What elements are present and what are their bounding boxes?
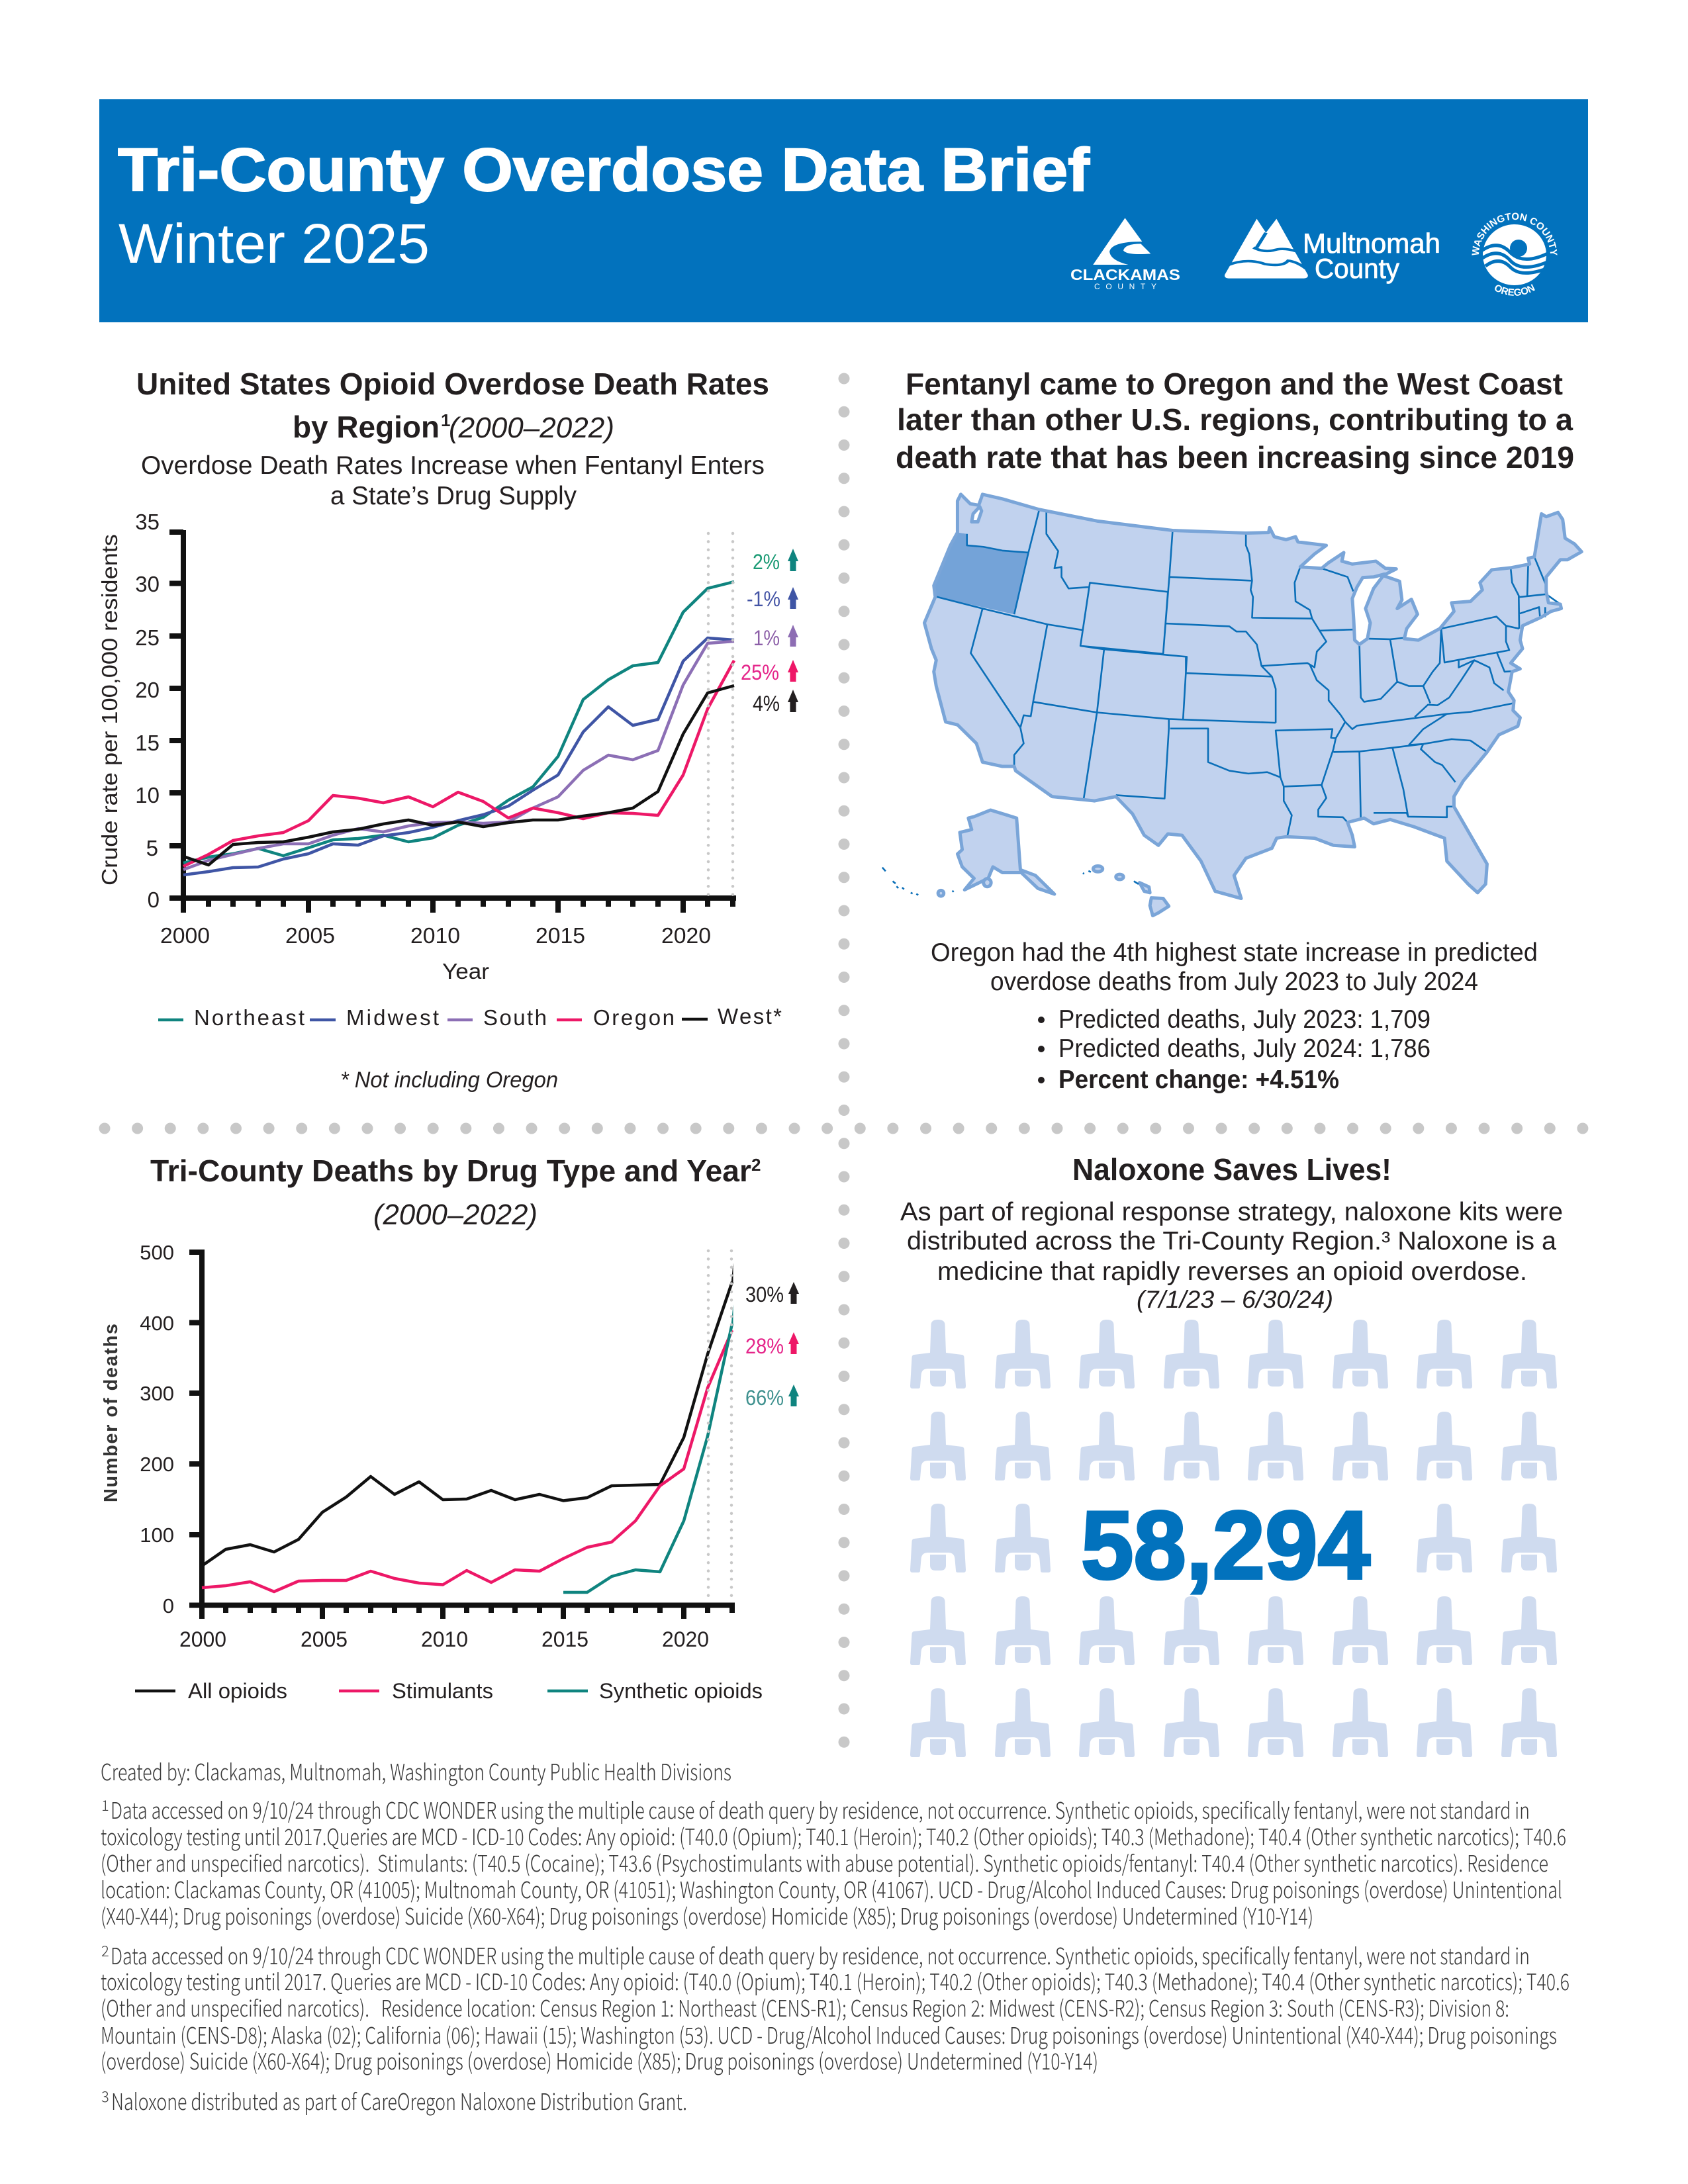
change labels: 30% — [745, 1283, 784, 1306]
change labels: 2% — [753, 550, 780, 574]
dotted dividers — [105, 379, 1585, 1747]
description: As part of regional response strategy, naloxone kits were — [900, 1198, 1563, 1226]
legend: Midwest — [346, 1005, 439, 1030]
panel: Fentanyl on the West Coast — [882, 367, 1581, 1094]
y axis labels: 0 — [163, 1594, 174, 1617]
logo: Multnomah County: County — [1315, 253, 1399, 284]
logo: Washington County — [1472, 213, 1558, 296]
heading: Tri-County Deaths by Drug Type and Year — [150, 1154, 751, 1188]
change labels: 1% — [753, 626, 780, 650]
legend: Oregon — [593, 1005, 675, 1030]
x axis labels — [160, 923, 711, 948]
heading: United States Opioid Overdose Death Rates — [136, 367, 769, 401]
series: All opioids — [202, 1263, 733, 1566]
heading: later than other U.S. regions, contributing to a — [897, 402, 1573, 437]
change arrows — [788, 1282, 799, 1406]
footnote 3: 3 — [101, 2085, 109, 2107]
logo: Washington County: WASHINGTON COUNTY — [1472, 213, 1558, 255]
panel: Naloxone saves lives — [900, 1152, 1563, 1757]
y axis labels: 5 — [146, 836, 158, 860]
header banner — [99, 99, 1588, 322]
panel: Tri-County deaths by drug type — [101, 1154, 799, 1703]
y axis labels: 30 — [135, 572, 160, 596]
logo: Clackamas County: CLACKAMAS — [1070, 266, 1180, 283]
map caption — [931, 938, 1538, 996]
footnote 3: Naloxone distributed as part of CareOregon Naloxone Distribution Grant. — [111, 2084, 687, 2116]
subheading: Overdose Death Rates Increase when Fentanyl Enters — [141, 451, 765, 480]
heading — [896, 367, 1574, 475]
axes — [169, 530, 736, 913]
series: Northeast — [183, 582, 734, 863]
y axis labels: 10 — [135, 783, 160, 807]
y axis labels: 25 — [135, 625, 160, 650]
legend: West* — [718, 1004, 782, 1028]
line chart: crude rate by region — [97, 510, 798, 983]
subtitle: Winter 2025 — [118, 212, 430, 275]
footnote 1 — [101, 1793, 1566, 1931]
series: Stimulants — [202, 1330, 732, 1592]
y axis labels: 300 — [140, 1382, 174, 1405]
x axis labels: 2010 — [421, 1627, 468, 1651]
heading: Naloxone Saves Lives! — [1072, 1152, 1391, 1187]
Hawaii and islands — [882, 866, 1169, 916]
legend: All opioids — [188, 1679, 287, 1703]
footnotes — [101, 1754, 1570, 2116]
y axis labels: 35 — [135, 510, 160, 534]
y axis labels: 100 — [140, 1524, 174, 1547]
change arrows — [788, 549, 798, 712]
x axis labels: 2015 — [541, 1627, 588, 1651]
y axis labels — [140, 1241, 174, 1617]
series: West — [183, 686, 734, 865]
x axis labels: 2020 — [662, 1627, 709, 1651]
legend: Synthetic opioids — [599, 1679, 763, 1703]
title: Tri-County Overdose Data Brief — [118, 136, 1090, 204]
description: distributed across the Tri-County Region.³ Naloxone is a — [907, 1227, 1556, 1255]
change labels — [741, 550, 780, 715]
x axis labels — [179, 1627, 709, 1651]
logo: Clackamas County: COUNTY — [1094, 282, 1156, 291]
change labels: 28% — [745, 1334, 784, 1358]
footnote 1: 1 — [101, 1794, 109, 1815]
x axis labels: 2005 — [285, 923, 335, 948]
panel: US opioid death rates — [97, 367, 798, 1093]
predicted deaths list: Predicted deaths, July 2023: 1,709 — [1058, 1005, 1430, 1034]
heading — [136, 367, 769, 444]
y axis title: Number of deaths — [101, 1324, 122, 1502]
x axis labels: 2015 — [536, 923, 585, 948]
description — [900, 1198, 1563, 1313]
heading — [150, 1154, 761, 1231]
state borders — [935, 510, 1560, 835]
predicted deaths list: Percent change: +4.51% — [1058, 1066, 1339, 1094]
subheading: a State’s Drug Supply — [330, 482, 577, 510]
x axis title: Year — [442, 959, 489, 983]
map caption: Oregon had the 4th highest state increase in predicted — [931, 938, 1538, 967]
subheading — [141, 451, 765, 510]
change labels — [745, 1283, 784, 1410]
logo: Washington County: OREGON — [1495, 284, 1535, 296]
logo: Multnomah County: Multnomah — [1303, 228, 1440, 259]
x axis labels: 2010 — [410, 923, 460, 948]
x axis labels: 2000 — [160, 923, 210, 948]
legend: Stimulants — [392, 1679, 493, 1703]
y axis labels: 200 — [140, 1453, 174, 1476]
change labels: -1% — [747, 587, 780, 611]
credit: Created by: Clackamas, Multnomah, Washington County Public Health Divisions — [101, 1754, 731, 1787]
x axis labels: 2000 — [179, 1627, 226, 1651]
description: (7/1/23 – 6/30/24) — [1137, 1286, 1333, 1313]
line chart: deaths by drug type — [101, 1241, 799, 1651]
y axis labels — [135, 510, 160, 912]
predicted deaths list: Predicted deaths, July 2024: 1,786 — [1058, 1034, 1430, 1063]
heading: Fentanyl came to Oregon and the West Coast — [906, 367, 1563, 401]
legend — [135, 1679, 763, 1703]
y axis labels: 400 — [140, 1312, 174, 1335]
y axis title: Crude rate per 100,000 residents — [97, 534, 122, 886]
y axis labels: 0 — [148, 887, 160, 912]
x axis labels: 2020 — [661, 923, 711, 948]
series: South — [183, 641, 734, 870]
x axis labels: 2005 — [301, 1627, 348, 1651]
axes — [189, 1250, 735, 1619]
legend: South — [483, 1005, 547, 1030]
footnote 2: 2 — [101, 1940, 109, 1961]
heading: 1 — [441, 410, 450, 430]
outer coastline — [924, 494, 1581, 899]
logo: Clackamas County — [1070, 218, 1180, 291]
y axis labels: 20 — [135, 678, 160, 702]
Alaska — [957, 810, 1055, 894]
US map — [882, 494, 1581, 916]
footnote 2 — [101, 1938, 1570, 2076]
description: medicine that rapidly reverses an opioid overdose. — [937, 1257, 1527, 1286]
series: Synthetic opioids — [563, 1304, 733, 1592]
footnote 2: (overdose) Suicide (X60-X64); Drug poisonings (overdose) Homicide (X85); Drug poisonings (overdose) Undetermined (Y10-Y14) — [101, 2044, 1098, 2076]
heading: death rate that has been increasing since 2019 — [896, 440, 1574, 475]
series: Oregon — [183, 660, 734, 866]
heading: 2 — [751, 1155, 761, 1175]
Oregon highlight — [934, 533, 1029, 614]
Great Lakes and Puget Sound — [972, 507, 1384, 645]
big number: 58,294 — [1081, 1491, 1370, 1599]
heading: by Region — [293, 410, 440, 444]
y axis labels: 500 — [140, 1241, 174, 1264]
legend — [158, 1004, 782, 1030]
icon grid: naloxone kits — [910, 1320, 1557, 1757]
change labels: 25% — [741, 660, 779, 684]
series: Midwest — [183, 638, 734, 875]
note: * Not including Oregon — [340, 1068, 558, 1093]
logo: Multnomah County — [1225, 219, 1440, 284]
contiguous states fill — [924, 494, 1581, 899]
heading: (2000–2022) — [449, 412, 614, 444]
change labels: 4% — [753, 692, 780, 715]
predicted deaths list — [1038, 1005, 1430, 1094]
legend: Northeast — [194, 1005, 305, 1030]
heading: (2000–2022) — [373, 1199, 538, 1231]
change labels: 66% — [745, 1386, 784, 1410]
footnote 1: (X40-X44); Drug poisonings (overdose) Suicide (X60-X64); Drug poisonings (overdose) Homicide (X85); Drug poisonings (overdose) Undetermined (Y10-Y14) — [101, 1899, 1313, 1931]
y axis labels: 15 — [135, 731, 160, 755]
map caption: overdose deaths from July 2023 to July 2024 — [990, 968, 1478, 996]
